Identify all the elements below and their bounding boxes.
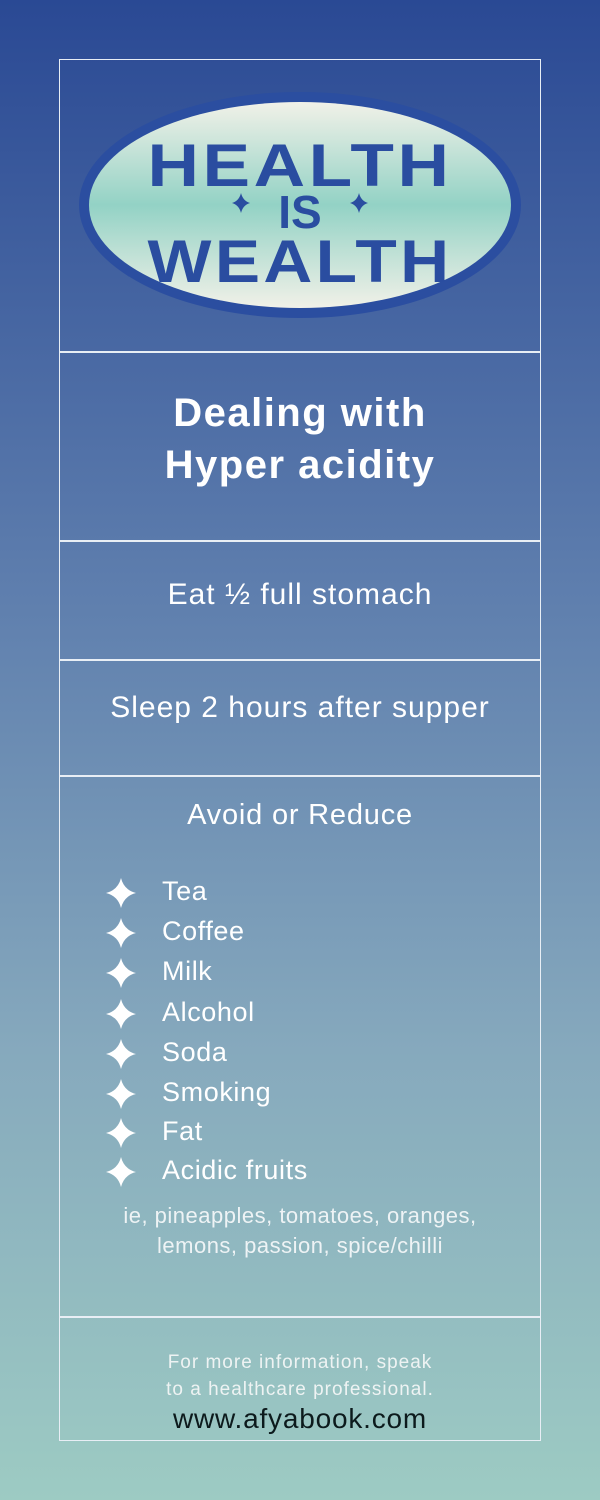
heading: avoid or reduce: Avoid or Reduce — [187, 799, 413, 831]
list of items: Fat — [162, 1116, 203, 1146]
logo: health is wealth: HEALTH — [148, 132, 452, 199]
note: acidic fruits examples: ie, pineapples, tomatoes, oranges, — [123, 1203, 477, 1228]
title: Dealing with — [173, 391, 427, 435]
list of items — [106, 876, 308, 1187]
list of items: Coffee — [162, 916, 245, 946]
footer note: to a healthcare professional. — [166, 1379, 434, 1400]
list of items: Smoking — [162, 1077, 271, 1107]
tip: eat half: Eat ½ full stomach — [168, 578, 432, 611]
frame — [59, 59, 541, 1441]
list of items: Milk — [162, 956, 212, 986]
title: Hyper acidity — [165, 443, 435, 487]
note: acidic fruits examples — [123, 1203, 477, 1258]
note: acidic fruits examples: lemons, passion, spice/chilli — [157, 1233, 443, 1258]
title — [165, 391, 435, 487]
footer note — [166, 1352, 434, 1400]
list of items: Soda — [162, 1037, 227, 1067]
logo: health is wealth: WEALTH — [148, 228, 452, 295]
website: www.afyabook.com — [173, 1403, 427, 1434]
footer note: For more information, speak — [168, 1352, 432, 1373]
list of items: Tea — [162, 876, 207, 906]
list of items: Acidic fruits — [162, 1155, 308, 1185]
logo: health is wealth — [79, 92, 521, 318]
tip: sleep: Sleep 2 hours after supper — [110, 691, 490, 724]
list of items: Alcohol — [162, 997, 255, 1027]
logo: health is wealth: IS — [278, 186, 322, 238]
